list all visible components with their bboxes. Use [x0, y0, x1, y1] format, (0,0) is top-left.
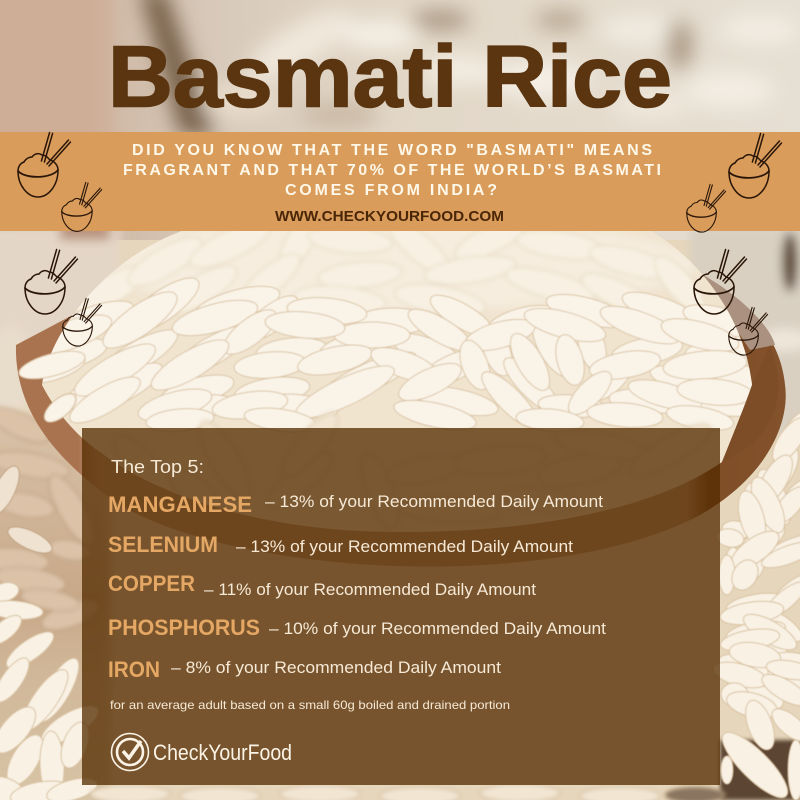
- row: manganese: [108, 492, 603, 517]
- row: iron: [108, 657, 501, 682]
- panel: top 5 nutrients: [82, 428, 720, 785]
- front grains, crisp: [42, 277, 752, 431]
- banner: did you know: [0, 132, 800, 231]
- row: phosphorus: PHOSPHORUS: [108, 615, 260, 640]
- bottom rice: [90, 784, 725, 800]
- row: iron: IRON: [108, 657, 160, 682]
- footnote: for an average adult based on a small 60g boiled and drained portion: [110, 698, 510, 712]
- row: copper: [108, 571, 536, 599]
- row: selenium: SELENIUM: [108, 532, 218, 557]
- crisp white rice, lower left: [0, 580, 104, 800]
- blurred top rice: [0, 0, 800, 150]
- rice below banner, left and right edges: [0, 224, 800, 435]
- row: copper: COPPER: [108, 571, 195, 596]
- speckled rim shading: [722, 345, 778, 462]
- logo: CheckYourFood: [112, 734, 292, 770]
- back grains, slightly blurred: [76, 231, 704, 312]
- icon: rice bowl 2: [62, 182, 102, 231]
- left blurred tan rice: [0, 401, 103, 637]
- icon: rice bowl 6: [687, 184, 726, 232]
- wooden bowl: [16, 240, 786, 566]
- banner text: COMES FROM INDIA?: [285, 182, 497, 199]
- rice mound in the bowl: [42, 225, 752, 532]
- crisp white rice, right side: [720, 740, 800, 800]
- heading: Basmati Rice: Basmati Rice: [108, 28, 672, 126]
- icon: rice bowl 3: [25, 250, 78, 314]
- row: selenium: – 13% of your Recommended Daily Amount: [236, 537, 573, 556]
- icon: rice bowl 8: [729, 307, 768, 355]
- row: selenium: [108, 532, 573, 557]
- website link: WWW.CHECKYOURFOOD.COM: [275, 208, 504, 225]
- panel heading: The Top 5:: [111, 457, 204, 477]
- icon: rice bowl 7: [694, 250, 746, 314]
- banner text: FRAGRANT AND THAT 70% OF THE WORLD’S BASMATI: [123, 162, 661, 179]
- rice under the panel: [198, 410, 713, 428]
- icon: rice bowl 4: [63, 298, 102, 346]
- row: iron: – 8% of your Recommended Daily Amount: [171, 658, 501, 677]
- banner text: DID YOU KNOW THAT THE WORD "BASMATI" MEANS: [132, 142, 652, 159]
- row: manganese: MANGANESE: [108, 492, 252, 517]
- banner text: [123, 142, 661, 199]
- icon: rice bowl 1: [18, 132, 70, 197]
- row: manganese: – 13% of your Recommended Daily Amount: [265, 492, 603, 511]
- grains overlapping the left rim: [16, 346, 88, 427]
- icon: rice bowl 5: [729, 134, 782, 198]
- row: phosphorus: [108, 615, 606, 640]
- logo: CheckYourFood: CheckYourFood: [153, 740, 292, 765]
- row: copper: – 11% of your Recommended Daily Amount: [204, 580, 536, 599]
- row: phosphorus: – 10% of your Recommended Daily Amount: [269, 619, 606, 638]
